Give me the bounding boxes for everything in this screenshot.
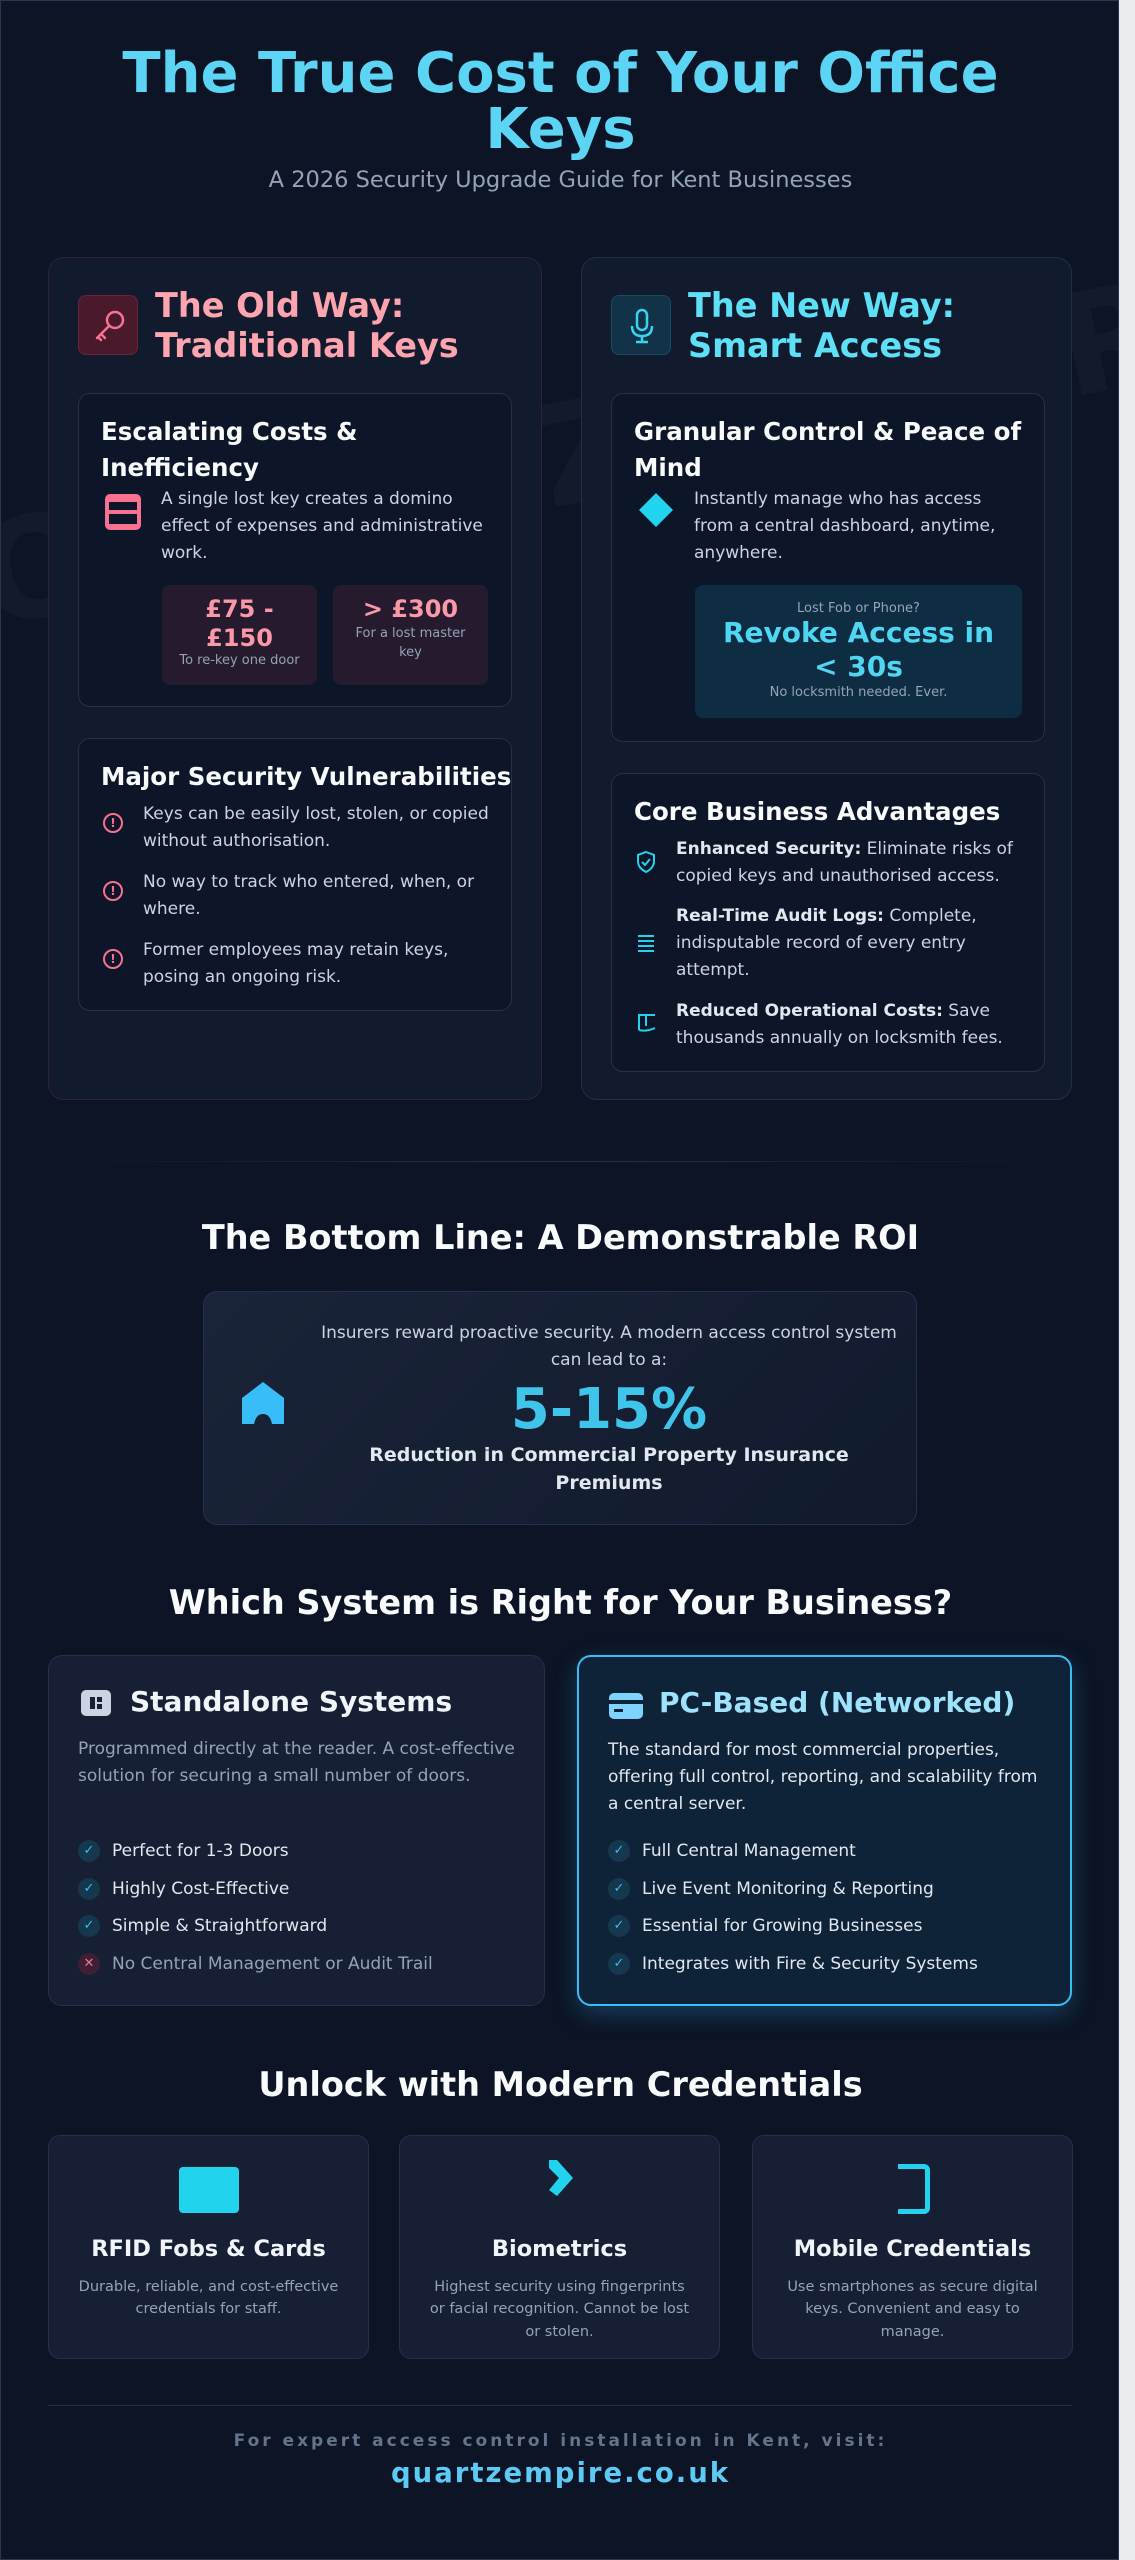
panel: standalone: Programmed directly at the reader. A cost-effective solution for securing a small number of doors. <box>78 1739 515 1786</box>
list: standalone features: Simple & Straightforward <box>112 1916 327 1936</box>
card: advantages: Core Business Advantages <box>634 797 1000 826</box>
panel: old way <box>48 257 542 1100</box>
stat: master key <box>333 585 488 685</box>
list: vulnerabilities: ! <box>110 884 116 898</box>
panel: ROI: Reduction in Commercial Property Insurance Premiums <box>369 1444 849 1494</box>
title: The True Cost of Your Office <box>122 41 999 106</box>
list: advantages <box>637 839 1014 1048</box>
list: standalone features: Highly Cost-Effective <box>112 1878 289 1898</box>
list: vulnerabilities: ! <box>110 816 116 830</box>
panel heading: Smart Access <box>688 326 942 365</box>
list: PC features: Full Central Management <box>642 1841 856 1861</box>
panel: ROI: Insurers reward proactive security. A modern access control system can lead to a: <box>321 1323 897 1370</box>
footer text: For expert access control installation in Kent, visit: <box>234 2431 887 2451</box>
callout: revoke access: Lost Fob or Phone? <box>797 601 920 616</box>
list: vulnerabilities: No way to track who entered, when, or where. <box>143 872 474 919</box>
panel: ROI <box>203 1291 917 1525</box>
stat: re-key: £150 <box>206 624 273 652</box>
panel heading: Traditional Keys <box>155 326 459 365</box>
card: escalating costs: A single lost key creates a domino effect of expenses and administrative work. <box>161 489 483 563</box>
list: vulnerabilities: Keys can be easily lost, stolen, or copied without authorisation. <box>143 804 489 851</box>
list: advantages: Real-Time Audit Logs: Complete, indisputable record of every entry attempt. <box>676 906 977 980</box>
list: PC features: ✓ <box>614 1918 624 1933</box>
icon: key <box>78 295 138 355</box>
icon: grid <box>81 1690 111 1716</box>
list: standalone features: ✓ <box>84 1918 94 1933</box>
card: biometrics: Biometrics <box>492 2236 627 2262</box>
card: granular control: Instantly manage who has access from a central dashboard, anytime, anywhere. <box>694 489 995 563</box>
footer link: quartzempire.co.uk <box>391 2457 730 2489</box>
callout: revoke access: < 30s <box>814 650 903 683</box>
card: granular control: Granular Control & Peace of <box>634 417 1021 446</box>
icon: microphone <box>611 295 671 355</box>
icon: wallet <box>105 494 141 530</box>
heading: bottom line: The Bottom Line: A Demonstrable ROI <box>202 1218 919 1257</box>
heading: which system: Which System is Right for Your Business? <box>169 1583 952 1622</box>
icon: house <box>242 1382 284 1424</box>
list: PC features: ✓ <box>614 1843 624 1858</box>
list: PC features: ✓ <box>614 1880 624 1896</box>
icon: phone <box>898 2164 930 2214</box>
stat: master key: > £300 <box>363 595 458 623</box>
list: vulnerabilities: Former employees may retain keys, posing an ongoing risk. <box>143 940 448 987</box>
icon: fingerprint chevron <box>549 2160 573 2196</box>
title <box>122 41 999 162</box>
stat: re-key <box>162 585 317 685</box>
panel heading <box>155 286 459 365</box>
panel: new way <box>581 257 1072 1100</box>
list: standalone features: Perfect for 1-3 Doors <box>112 1841 289 1861</box>
list: advantages: Enhanced Security: Eliminate risks of copied keys and unauthorised access. <box>676 839 1013 886</box>
list: standalone features: ✓ <box>84 1843 94 1858</box>
stat: 5-15%: 5-15% <box>511 1377 707 1442</box>
icon: diamond <box>639 493 673 527</box>
list: standalone features: No Central Management or Audit Trail <box>112 1954 433 1974</box>
panel heading: The New Way: <box>688 286 955 325</box>
list: standalone features <box>78 1840 433 1975</box>
callout: revoke access <box>695 585 1022 718</box>
stat: re-key: To re-key one door <box>179 653 300 668</box>
card: escalating costs: Escalating Costs & <box>101 417 358 446</box>
panel heading: The Old Way: <box>155 286 404 325</box>
card: advantages <box>611 773 1045 1072</box>
list: vulnerabilities: ! <box>110 952 116 966</box>
list: advantages: Reduced Operational Costs: Save thousands annually on locksmith fees. <box>676 1001 1003 1048</box>
list: standalone features: ✕ <box>84 1956 94 1970</box>
icon: card <box>179 2167 239 2213</box>
list: standalone features: ✓ <box>84 1880 94 1896</box>
stat: master key: For a lost master key <box>356 626 465 660</box>
card: biometrics: Highest security using fingerprints or facial recognition. Cannot be lost or stolen. <box>430 2279 689 2340</box>
card: granular control: Mind <box>634 453 702 482</box>
list: PC features: Integrates with Fire & Security Systems <box>642 1954 978 1974</box>
icon: card <box>609 1693 643 1719</box>
list: PC features <box>608 1840 978 1975</box>
card: vulnerabilities <box>78 738 512 1011</box>
card: mobile <box>752 2135 1073 2359</box>
card: escalating costs: Inefficiency <box>101 453 259 482</box>
panel: standalone <box>48 1655 545 2006</box>
callout: revoke access: No locksmith needed. Ever. <box>770 685 947 700</box>
callout: revoke access: Revoke Access in <box>723 616 994 649</box>
card: vulnerabilities: Major Security Vulnerabilities <box>101 762 511 791</box>
card: escalating costs <box>78 393 512 707</box>
card: RFID: Durable, reliable, and cost-effective credentials for staff. <box>79 2279 338 2317</box>
subtitle: A 2026 Security Upgrade Guide for Kent Businesses <box>269 167 852 193</box>
panel: PC-based: PC-Based (Networked) <box>659 1686 1015 1719</box>
card: granular control <box>611 393 1045 742</box>
card: RFID <box>48 2135 369 2359</box>
card: biometrics <box>399 2135 720 2359</box>
title: Keys <box>485 97 636 162</box>
stat: re-key: £75 - <box>205 595 274 623</box>
card: mobile: Use smartphones as secure digital keys. Convenient and easy to manage. <box>787 2279 1038 2340</box>
panel: PC-based: The standard for most commercial properties, offering full control, reporting, and scalability from a central server. <box>608 1740 1037 1814</box>
card: RFID: RFID Fobs & Cards <box>91 2236 326 2262</box>
list: PC features: Essential for Growing Businesses <box>642 1916 922 1936</box>
list: PC features: Live Event Monitoring & Reporting <box>642 1878 934 1898</box>
panel heading <box>688 286 955 365</box>
panel: standalone: Standalone Systems <box>130 1685 452 1718</box>
list: PC features: ✓ <box>614 1956 624 1970</box>
card: mobile: Mobile Credentials <box>794 2236 1031 2262</box>
heading: credentials: Unlock with Modern Credentials <box>258 2065 863 2104</box>
list: vulnerabilities <box>103 804 489 987</box>
panel: PC-based <box>577 1655 1072 2006</box>
